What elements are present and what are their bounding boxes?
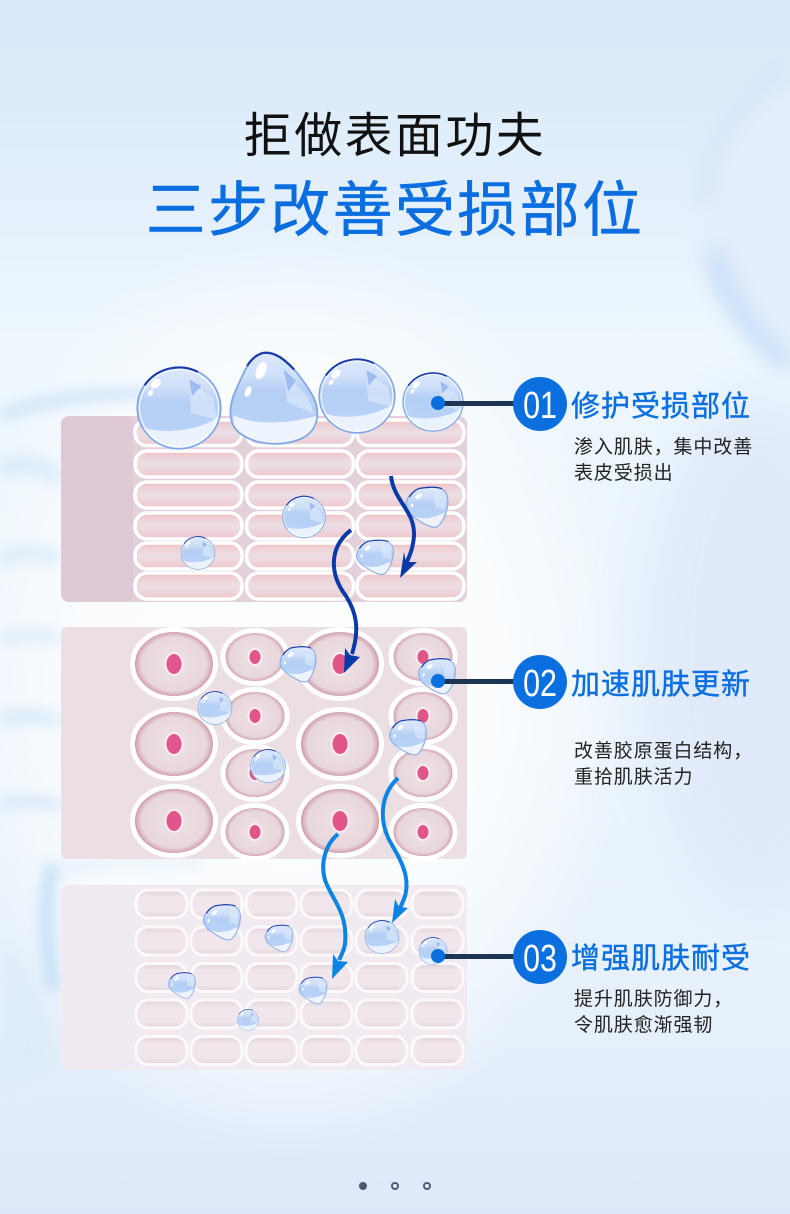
heading 02: 加速肌肤更新 <box>571 668 751 701</box>
badge 02 <box>513 655 567 709</box>
badge 02: 02 <box>523 663 557 705</box>
water droplets <box>137 353 463 1031</box>
body 01 <box>574 436 753 484</box>
panel: skin layer 2 <box>61 627 467 859</box>
arrow: dark blue right <box>391 476 417 578</box>
connector 03 <box>431 949 516 963</box>
title line 2: 三步改善受损部位 <box>146 177 644 244</box>
body 03 <box>574 988 733 1036</box>
connector 01 <box>431 396 516 410</box>
panel: skin layer 1 <box>61 416 467 602</box>
heading 03: 增强肌肤耐受 <box>571 942 751 975</box>
connector 02 <box>431 674 516 688</box>
arrow: light blue left <box>323 834 348 979</box>
arrow: light blue right <box>383 778 408 923</box>
body 03: 提升肌肤防御力， <box>574 988 733 1010</box>
body 03: 令肌肤愈渐强韧 <box>574 1014 713 1036</box>
body 02: 重拾肌肤活力 <box>574 766 693 788</box>
badge 03 <box>513 930 567 984</box>
title line 1: 拒做表面功夫 <box>244 110 546 163</box>
panel: skin layer 3 <box>61 885 467 1070</box>
heading 01: 修护受损部位 <box>571 390 751 423</box>
badge 01: 01 <box>523 385 557 427</box>
body 01: 表皮受损出 <box>574 462 674 484</box>
badge 01 <box>513 377 567 431</box>
callout 02 <box>431 655 753 788</box>
body 01: 渗入肌肤，集中改善 <box>574 436 753 458</box>
body 02: 改善胶原蛋白结构， <box>574 740 753 762</box>
callout 03 <box>431 930 751 1036</box>
body 02 <box>574 740 753 788</box>
arrow: dark blue left <box>334 530 360 673</box>
callout 01 <box>431 377 753 484</box>
badge 03: 03 <box>523 938 557 980</box>
title <box>146 110 644 244</box>
pagination dots <box>359 1182 430 1190</box>
